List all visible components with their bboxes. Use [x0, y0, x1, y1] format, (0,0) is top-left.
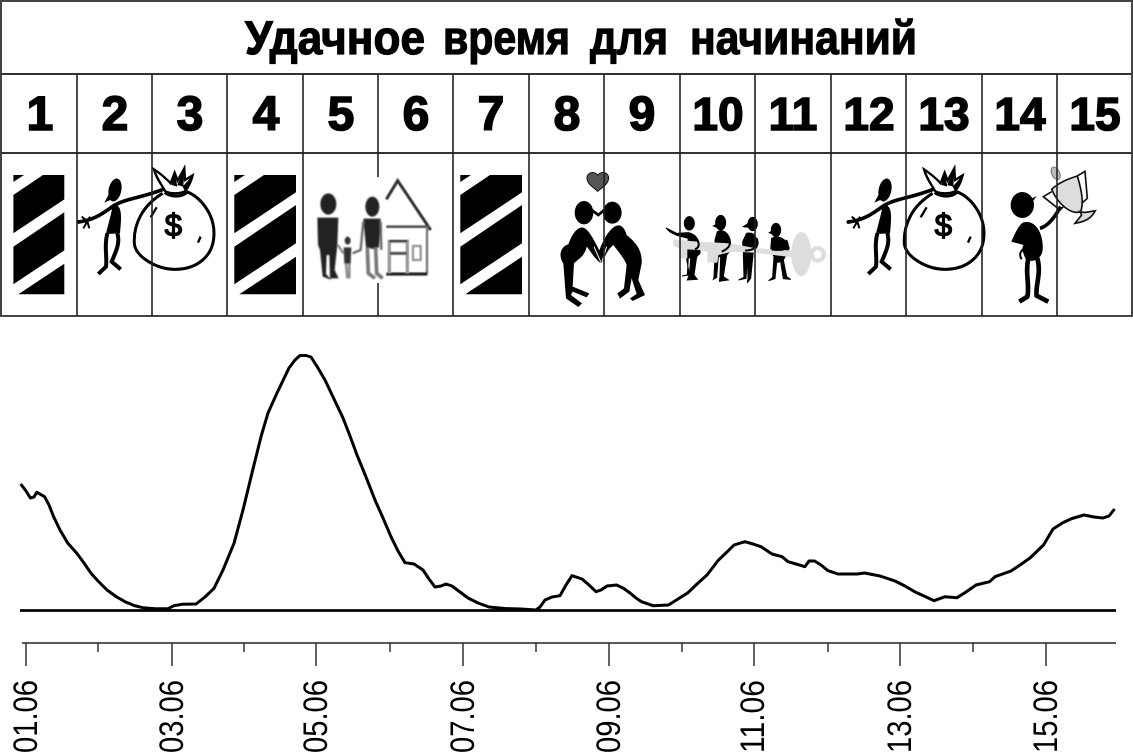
day numbers row: [27, 88, 1121, 141]
day numbers row: 9: [629, 88, 655, 141]
axis date labels: 11.06: [734, 680, 772, 753]
day numbers row: 4: [253, 88, 280, 141]
icon: man with money bag days 2-3: [78, 168, 214, 274]
icon: hazard block day 7: [460, 175, 522, 294]
axis date labels: 15.06: [1027, 680, 1065, 753]
icon: man with money bag days 2-3: $: [165, 208, 182, 243]
title: время: [443, 11, 570, 64]
icon: man with trophy days 14-15: [1011, 166, 1095, 302]
day numbers row: 6: [403, 88, 429, 141]
day numbers row: 2: [102, 88, 128, 141]
date axis: [7, 643, 1116, 753]
day numbers row: 5: [328, 88, 354, 141]
axis date labels: 05.06: [297, 680, 335, 753]
table grid: [1, 1, 1132, 316]
trophy: [1043, 166, 1095, 223]
figure arms over key: [693, 235, 788, 252]
title: Удачное: [245, 11, 425, 64]
icon: man with money bag days 12-13: $: [935, 208, 952, 243]
chart curve: [21, 356, 1115, 610]
axis date labels: [7, 680, 1065, 753]
day numbers row: 14: [994, 88, 1046, 140]
axis ticks: [22, 643, 1116, 666]
icon: couple with heart days 8-9: [561, 173, 645, 307]
day numbers row: 12: [843, 88, 895, 140]
icon: hazard block day 1: [13, 175, 64, 294]
day numbers row: 8: [554, 88, 580, 141]
axis date labels: 13.06: [881, 680, 919, 753]
title: начинаний: [690, 11, 917, 64]
house: [386, 181, 431, 274]
chart baseline: [20, 609, 1116, 612]
day numbers row: 13: [918, 88, 970, 140]
day numbers row: 1: [27, 88, 53, 141]
icon: people holding key days 10-11: [666, 215, 826, 283]
day numbers row: 3: [177, 88, 203, 141]
figures: [666, 215, 791, 283]
axis date labels: 07.06: [444, 680, 482, 753]
axis date labels: 03.06: [153, 680, 191, 753]
icon: man with money bag days 12-13: [848, 168, 984, 274]
axis date labels: 01.06: [7, 680, 45, 753]
axis date labels: 09.06: [590, 680, 628, 753]
day numbers row: 10: [692, 88, 744, 140]
title: для: [590, 11, 668, 64]
day numbers row: 15: [1069, 88, 1121, 140]
day numbers row: 7: [478, 88, 504, 141]
key: [673, 232, 826, 276]
icon: hazard block day 4: [234, 175, 296, 294]
line chart: [20, 356, 1116, 610]
day numbers row: 11: [769, 88, 817, 140]
icon: family with house days 5-6: [317, 181, 431, 280]
family figures: [317, 193, 383, 280]
